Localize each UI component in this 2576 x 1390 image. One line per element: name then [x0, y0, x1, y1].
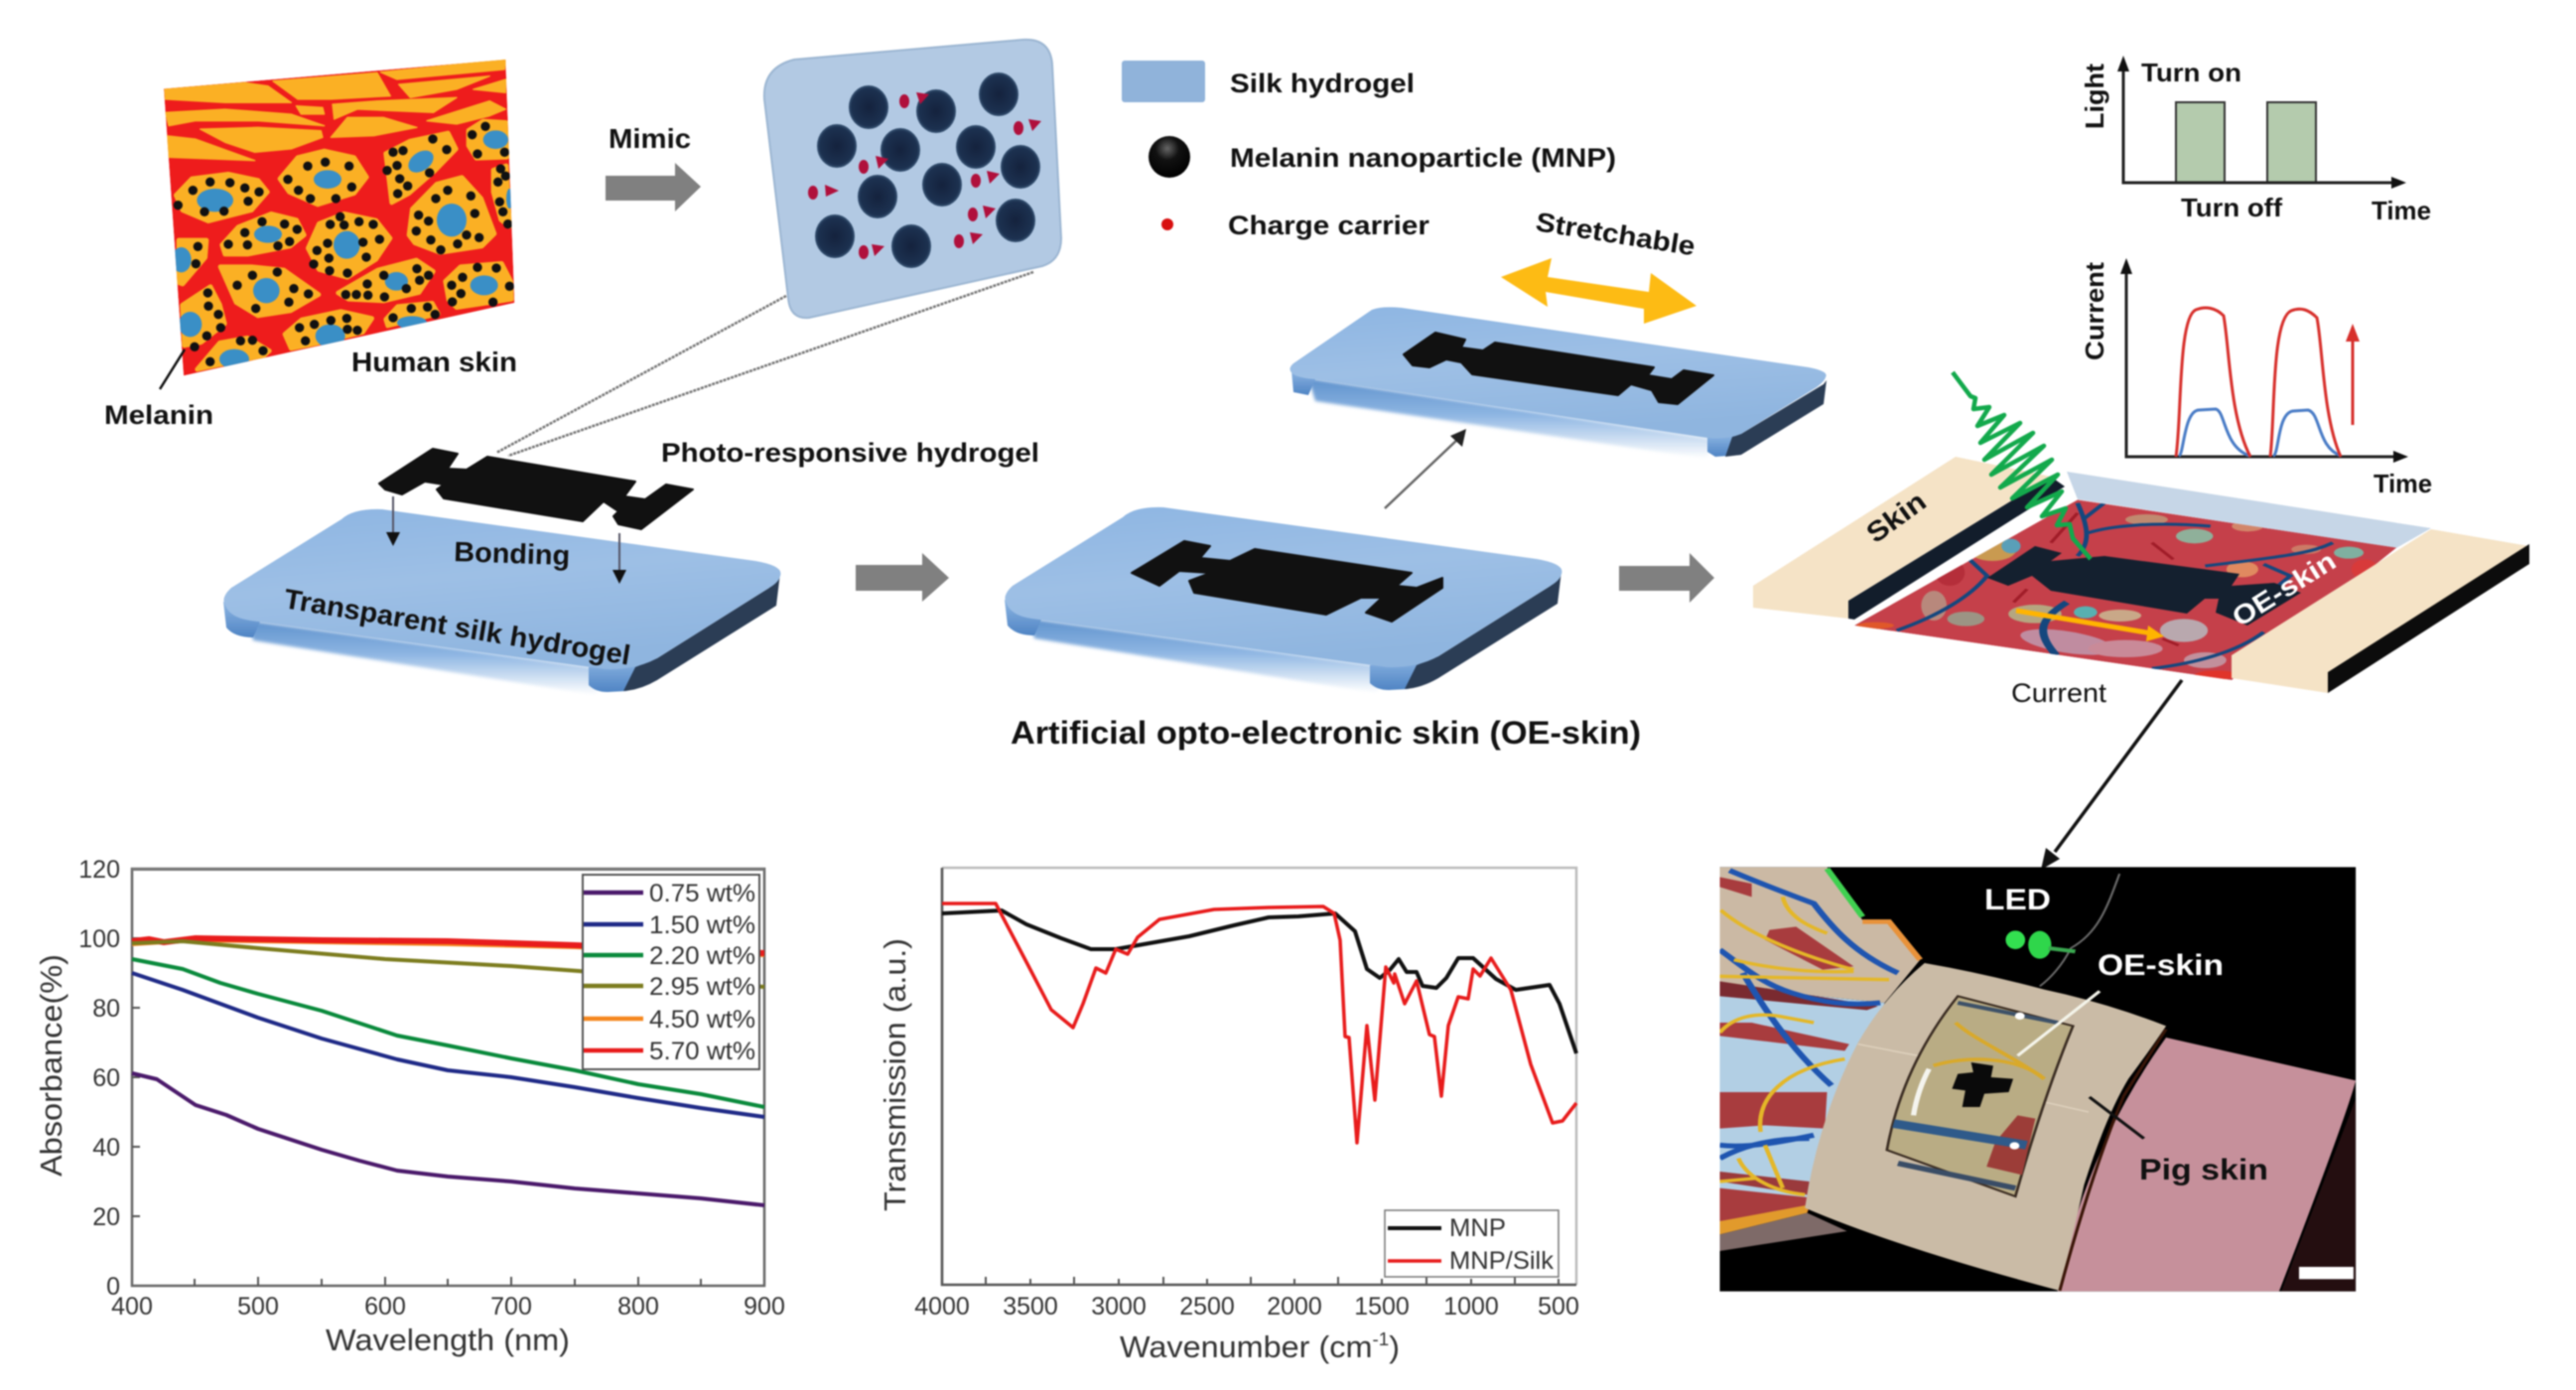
label: Time: Time [2372, 196, 2431, 225]
pig skin [2058, 1038, 2356, 1292]
label: Current: Current [2080, 262, 2109, 360]
dark lower right [2281, 1099, 2356, 1292]
x axis tick labels: 600 [364, 1293, 406, 1320]
legend: 2.20 wt% [649, 942, 755, 970]
tissue area [1854, 499, 2396, 680]
x axis tick labels: 1000 [1443, 1293, 1499, 1320]
stratum layers [165, 60, 505, 161]
legend: 4.50 wt% [649, 1006, 755, 1034]
melanin dots [174, 122, 514, 366]
right skin strip [2232, 529, 2529, 693]
arrow: device to photo [2041, 680, 2182, 870]
x axis title: -1 [1372, 1329, 1389, 1349]
window contents [1894, 1003, 2058, 1188]
melanin leader line [160, 349, 185, 389]
panel: transmission chart [878, 868, 1579, 1364]
legend: melanin sphere [1149, 136, 1190, 178]
panel: OE-skin plate [1005, 507, 1561, 693]
label: OE-skin: OE-skin [2227, 546, 2341, 632]
x axis tick labels [111, 1293, 785, 1320]
panel: photograph of OE-skin on model arm [1719, 867, 2356, 1292]
white edge line [1854, 516, 2025, 623]
legend: 5.70 wt% [649, 1038, 755, 1065]
legend text: Melanin nanoparticle: Melanin nanoparticle (MNP) [1230, 143, 1616, 173]
x axis tick labels: 3000 [1091, 1293, 1147, 1320]
x axis tick labels: 1500 [1354, 1293, 1410, 1320]
label: Photo-responsive hydrogel: Photo-responsive hydrogel [661, 438, 1039, 468]
y axis tick labels: 120 [78, 856, 120, 884]
device on stretched plate [1404, 333, 1713, 404]
label: Time: Time [2373, 469, 2432, 498]
panel: absorbance chart [34, 856, 785, 1357]
label: Artificial opto-electronic skin: Artificial opto-electronic skin (OE-skin) [1011, 715, 1641, 751]
x axis tick labels: 800 [617, 1293, 659, 1320]
x axis tick labels: 700 [490, 1293, 532, 1320]
bonding arrow right [612, 533, 626, 584]
label: OE-skin: OE-skin [2098, 949, 2224, 982]
series curves [132, 938, 764, 1205]
skin frame [1805, 963, 2166, 1291]
green light wave [1953, 372, 2091, 559]
black cross electrode [1952, 1062, 2013, 1107]
y axis tick labels [78, 856, 120, 1301]
x axis tick labels [914, 1293, 1579, 1320]
leader: OE-skin [2018, 991, 2100, 1055]
right black edge [2328, 544, 2529, 693]
device on plate [1132, 541, 1442, 622]
legend: MNP [1449, 1214, 1506, 1242]
leader: pig skin [2090, 1097, 2144, 1139]
y axis title: Transmission (a.u.) [878, 938, 912, 1211]
chart: current vs time [2080, 258, 2432, 498]
MNP curve [942, 910, 1576, 1053]
frame window [1887, 996, 2073, 1196]
x axis tick labels: 2500 [1179, 1293, 1235, 1320]
legend [1385, 1210, 1559, 1277]
x axis title: ) [1389, 1329, 1400, 1364]
panel: human skin illustration [164, 60, 514, 375]
panel: OE-skin on skin illustration [1753, 372, 2529, 693]
y axis title: Absorbance(%) [34, 954, 68, 1177]
label: Mimic: Mimic [609, 123, 691, 154]
panel: magnified hydrogel with nanoparticles [764, 40, 1061, 318]
nuclei [172, 130, 513, 369]
legend [583, 875, 759, 1069]
legend: 2.95 wt% [649, 973, 755, 1001]
label: Stretchable: Stretchable [1534, 207, 1697, 261]
label: LED: LED [1984, 884, 2051, 916]
label: Current: Current [2011, 678, 2107, 708]
label: Melanin: Melanin [104, 400, 213, 430]
panel: stretched plate [1290, 307, 1827, 459]
label: Turn on: Turn on [2141, 58, 2241, 87]
current arrow [2016, 611, 2164, 641]
x axis title: Wavelength (nm) [326, 1322, 570, 1357]
x axis tick labels: 2000 [1267, 1293, 1322, 1320]
x axis tick labels: 500 [237, 1293, 279, 1320]
y axis tick labels: 0 [106, 1273, 120, 1301]
y axis tick labels: 60 [92, 1064, 120, 1092]
label: Bonding: Bonding [454, 536, 571, 571]
melanin nanoparticles [815, 72, 1040, 268]
label: Light: Light [2080, 64, 2109, 129]
photo-responsive hydrogel device [379, 449, 693, 529]
silk band [2067, 472, 2431, 548]
y axis tick labels: 80 [92, 995, 120, 1023]
label: Pig skin: Pig skin [2139, 1154, 2268, 1186]
arrow: process step 1 [856, 553, 949, 602]
legend text: Charge carrier: Charge carrier [1228, 210, 1430, 240]
x axis tick labels: 3500 [1003, 1293, 1058, 1320]
arrow: mimic [606, 163, 701, 211]
zoom guide lines [496, 272, 1033, 456]
yellow double arrow: stretchable [1501, 258, 1696, 324]
LED [2005, 874, 2119, 986]
legend: 1.50 wt% [649, 911, 755, 939]
x axis title: Wavenumber (cm [1120, 1329, 1361, 1364]
legend: 0.75 wt% [649, 880, 755, 907]
left skin strip [1753, 457, 2051, 619]
MNP/Silk curve [942, 904, 1576, 1143]
legend: charge carrier dot [1161, 218, 1173, 230]
label: Skin: Skin [1860, 486, 1932, 549]
x axis tick labels: 900 [744, 1293, 785, 1320]
chart: light vs time [2080, 56, 2431, 225]
legend: MNP/Silk [1449, 1247, 1554, 1275]
thin arrow to stretched plate [1385, 429, 1466, 508]
x axis tick labels: 500 [1538, 1293, 1579, 1320]
label: Human skin: Human skin [351, 347, 517, 377]
scale bar [2299, 1267, 2354, 1279]
cells [176, 121, 511, 369]
x axis tick labels: 4000 [914, 1293, 970, 1320]
x axis tick labels: 400 [111, 1293, 153, 1320]
y axis tick labels: 40 [92, 1134, 120, 1162]
charge carriers [808, 92, 1041, 259]
legend: silk hydrogel swatch [1122, 61, 1205, 102]
device on tissue [1987, 546, 2301, 626]
label: Transparent silk hydrogel: Transparent silk hydrogel [282, 583, 632, 671]
label: Turn off: Turn off [2181, 193, 2282, 222]
y axis tick labels: 100 [78, 925, 120, 953]
panel: transparent silk hydrogel plate [223, 509, 780, 695]
bonding arrow left [386, 496, 400, 546]
red up arrow [2346, 324, 2360, 425]
exposed tissue model [1719, 867, 1920, 1251]
arrow: process step 2 [1619, 553, 1714, 603]
black slit [1848, 477, 2065, 620]
y axis tick labels: 20 [92, 1203, 120, 1231]
legend text: Silk hydrogel: Silk hydrogel [1230, 69, 1415, 98]
